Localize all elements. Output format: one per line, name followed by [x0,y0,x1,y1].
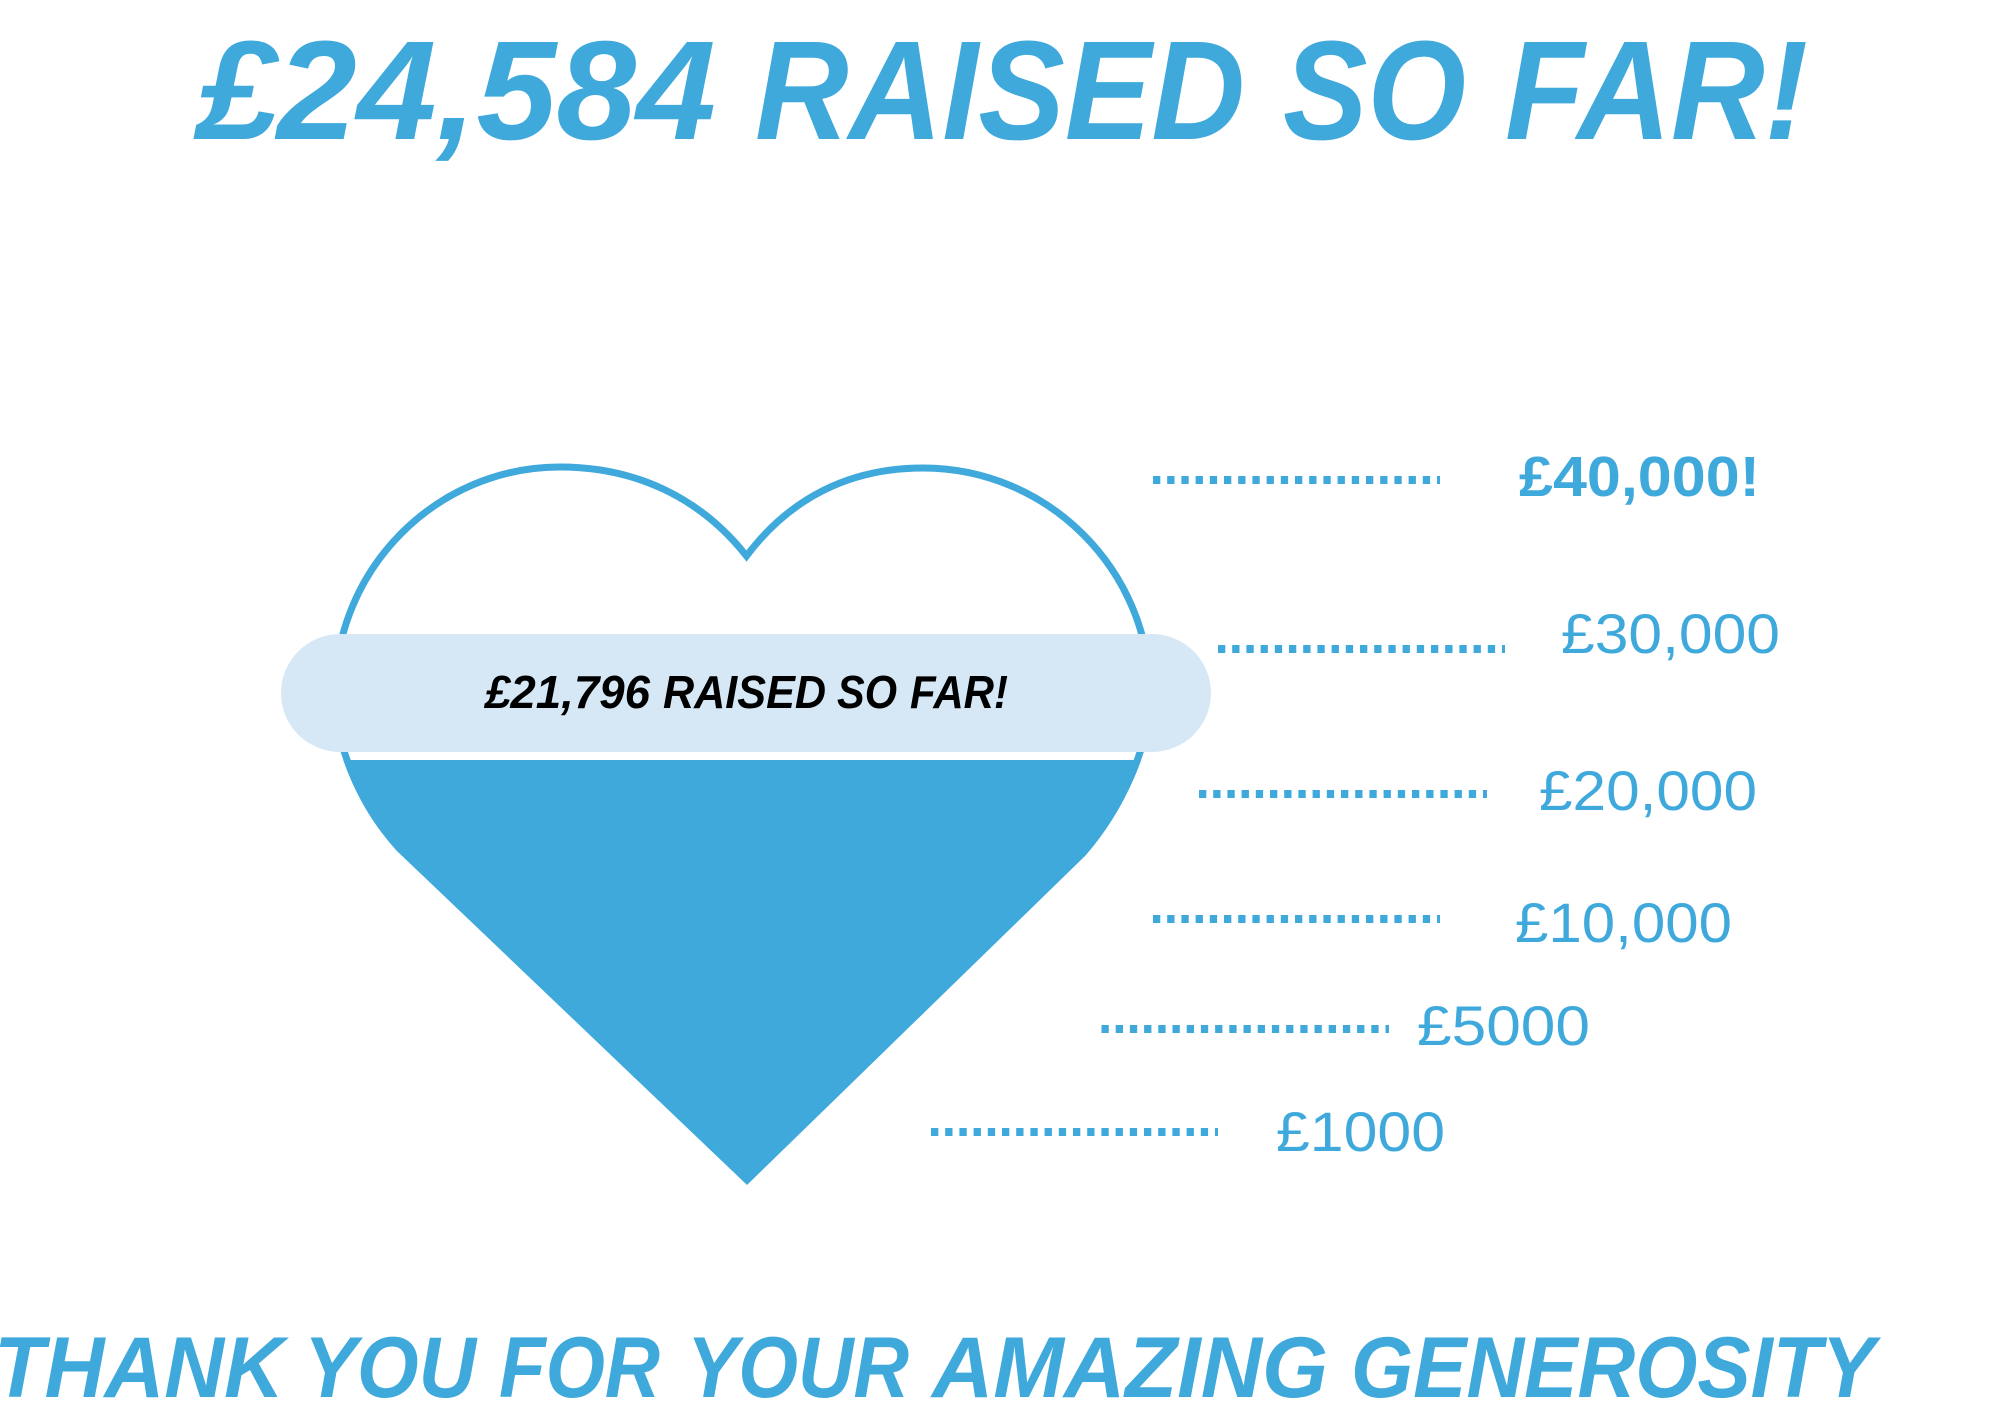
heart fill level [343,760,1142,1185]
banner text: RAISED [663,666,826,718]
banner text: SO [837,666,897,718]
milestone: 1000: £1000 [1276,1100,1445,1163]
heart thermometer [335,467,1150,1180]
milestone: 5000: £5000 [1417,994,1590,1057]
banner text: FAR! [910,666,1008,718]
title: SO [1283,11,1466,169]
heart outline [335,467,1150,1180]
milestone: 30,000: £30,000 [1561,602,1780,665]
footer thank you message: GENEROSITY [1351,1320,1881,1414]
milestone: 20,000: £20,000 [1539,759,1757,822]
milestone: 40,000: £40,000! [1519,445,1760,509]
milestone: 10,000: £10,000 [1515,891,1732,954]
amount banner [281,634,1211,752]
title: £24,584 [193,11,716,169]
footer thank you message: AMAZING [930,1320,1328,1414]
footer thank you message: YOU [304,1320,478,1414]
footer thank you message: FOR [499,1320,660,1414]
title [193,11,1808,169]
title: FAR! [1505,11,1808,169]
title: RAISED [755,11,1245,169]
banner text [483,666,1008,718]
banner text: £21,796 [483,666,650,718]
footer thank you message: YOUR [687,1320,909,1414]
footer thank you message [0,1320,1881,1414]
